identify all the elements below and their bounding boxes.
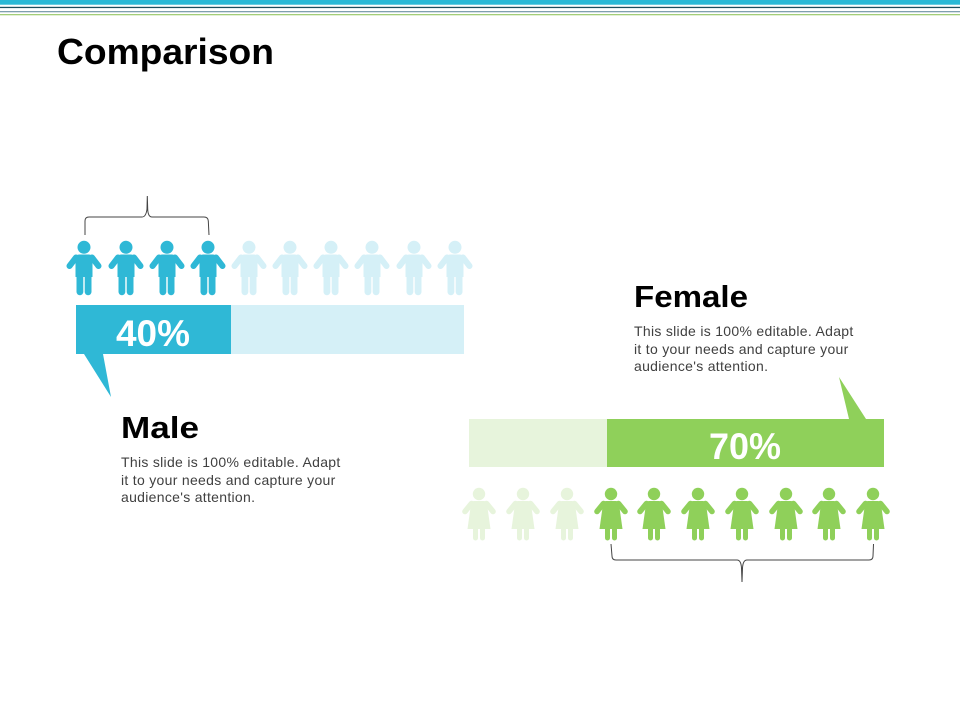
bar: female 70% [469,377,884,467]
icon row: male figures [70,241,470,295]
text block: female description: audience's attention. [634,358,768,374]
heading: female: Female [634,279,748,314]
bracket: male selection [85,196,209,235]
text block: female description: This slide is 100% editable. Adapt [634,323,854,339]
bar: male 40% [76,305,464,397]
bar: female 70%: 70% [709,426,781,467]
bar: male 40%: 40% [116,313,190,354]
text block: male description: This slide is 100% editable. Adapt [121,454,341,470]
bracket: female selection [611,544,874,582]
panel: male comparison [70,196,470,505]
heading: male: Male [121,410,199,445]
text block: male description: audience's attention. [121,489,255,505]
text block: male description: it to your needs and capture your [121,472,336,488]
header stripes [0,0,960,15]
title: Comparison [57,31,274,72]
text block: female description: it to your needs and capture your [634,341,849,357]
icon row: female figures [465,488,887,540]
panel: female comparison [465,279,887,582]
